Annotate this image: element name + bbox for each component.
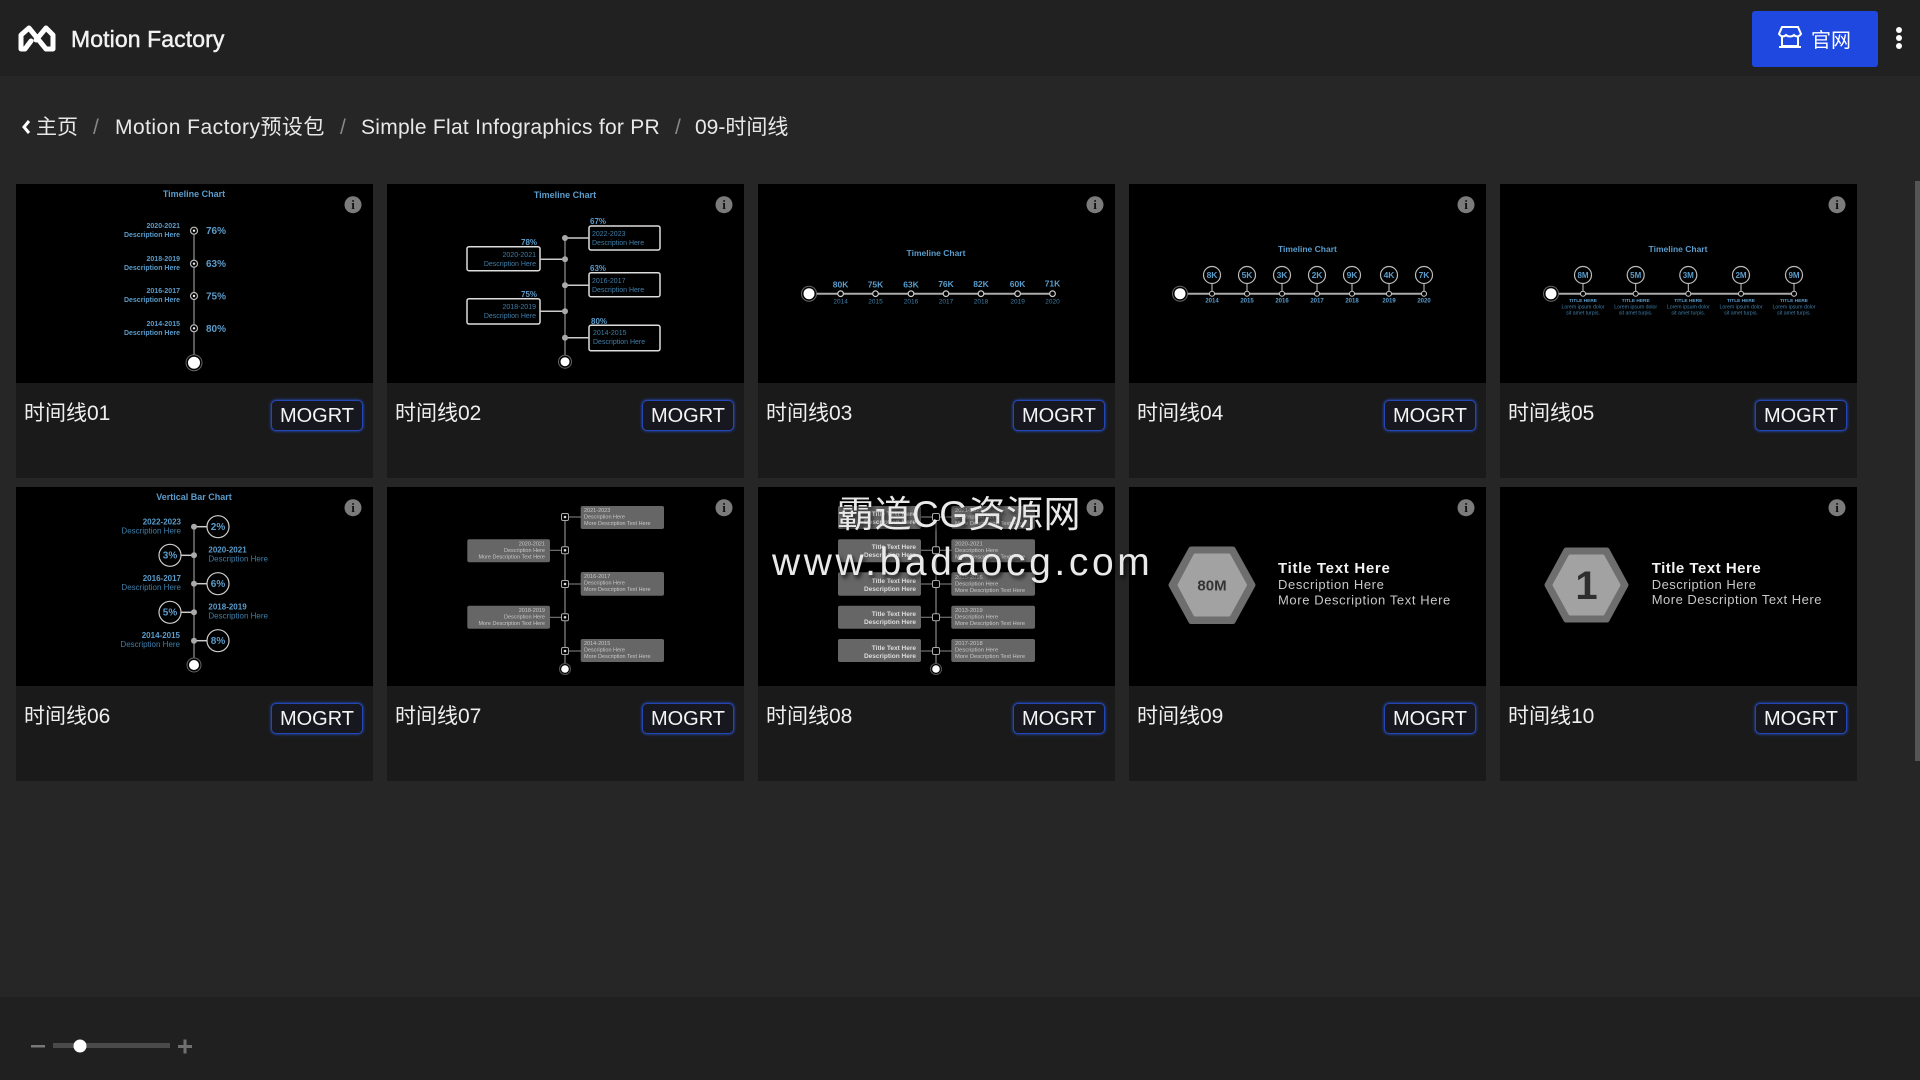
thumbnail 05: sit amet turpis. (1777, 310, 1811, 316)
MOGRT button: MOGRT (1764, 405, 1838, 427)
thumbnail 05: 5M (1630, 271, 1642, 280)
thumbnail 05: 3M (1683, 271, 1694, 280)
thumbnail 06: 6% (211, 579, 225, 590)
panel: card 02 (387, 184, 744, 478)
crumb: pack: Simple Flat Infographics for PR (361, 116, 660, 139)
thumbnail 05: sit amet turpis. (1671, 310, 1705, 316)
thumbnail 08: Title Text Here (872, 611, 916, 618)
thumbnail 08: More Description Text Here (955, 588, 1025, 594)
thumbnail 09: 80M (1197, 578, 1227, 594)
thumbnail 02: 80% (591, 317, 607, 326)
card title: 时间线01 (24, 402, 110, 425)
thumbnail 02: i (722, 197, 726, 212)
icon: more menu (1896, 27, 1902, 49)
thumbnail 08: More Description Text Here (955, 521, 1025, 527)
thumbnail 02: 2020-2021 (503, 252, 536, 259)
thumbnail 02: 2018-2019 (503, 304, 536, 311)
thumbnail 07: Description Here (584, 580, 625, 586)
thumbnail 05: TITLE HERE (1727, 298, 1756, 304)
MOGRT button: MOGRT (651, 708, 725, 730)
watermark line 1: 霸道CG资源网 (837, 494, 1081, 535)
watermark (772, 494, 1153, 586)
thumbnail 05: sit amet turpis. (1619, 310, 1653, 316)
thumbnail 04: i (1464, 197, 1468, 212)
card title: 时间线08 (766, 705, 852, 728)
thumbnail 06: 2% (211, 522, 225, 533)
MOGRT button: MOGRT (280, 405, 354, 427)
thumbnail 08: Description Here (955, 548, 998, 554)
thumbnail 01: 2018-2019 (147, 256, 180, 263)
thumbnail 04: 7K (1419, 270, 1430, 280)
thumbnail 03: 2019 (1010, 298, 1025, 306)
thumbnail 01: 80% (206, 324, 226, 335)
thumbnail 08: Description Here (955, 514, 998, 520)
thumbnail 10: More Description Text Here (1652, 592, 1822, 607)
thumbnail 01: Description Here (124, 330, 180, 337)
panel: card 09 (1129, 487, 1486, 781)
thumbnail 03: 2015 (868, 298, 883, 306)
logo icon (18, 26, 56, 52)
crumb separator: / (340, 116, 346, 139)
thumbnail 03: 2017 (939, 298, 954, 306)
thumbnail 08: Title Text Here (872, 544, 916, 551)
thumbnail 07: More Description Text Here (584, 587, 651, 593)
thumbnail 03: Timeline Chart (907, 248, 966, 258)
thumbnail 10: i (1835, 500, 1839, 515)
thumbnail 07: Description Here (584, 514, 625, 520)
button label: 官网 (1811, 30, 1851, 52)
thumbnail 05: 2M (1735, 271, 1747, 280)
thumbnail 05: TITLE HERE (1674, 298, 1703, 304)
card title: 时间线09 (1137, 705, 1223, 728)
MOGRT button (1013, 703, 1105, 734)
thumbnail 08: More Description Text Here (955, 554, 1025, 560)
card title: 时间线05 (1508, 402, 1594, 425)
thumbnail 08: Title Text Here (872, 645, 916, 652)
thumbnail 05: Lorem ipsum dolor (1773, 304, 1816, 310)
thumbnail 02: Description Here (484, 261, 536, 268)
panel: card 05 (1500, 184, 1857, 478)
thumbnail 02: Description Here (484, 313, 536, 320)
panel: card 10 (1500, 487, 1857, 781)
thumbnail 01: Description Here (124, 232, 180, 239)
thumbnail 02: Description Here (592, 240, 644, 247)
thumbnail 02: 2014-2015 (593, 330, 627, 337)
thumbnail 02: 63% (590, 264, 606, 273)
thumbnail 05: Lorem ipsum dolor (1720, 304, 1763, 310)
thumbnail 06: Description Here (208, 554, 269, 564)
thumbnail 01: 2020-2021 (147, 223, 180, 230)
thumbnail 08: Description Here (864, 653, 916, 660)
panel: card 03 (758, 184, 1115, 478)
thumbnail 05: TITLE HERE (1569, 298, 1598, 304)
thumbnail 08: Title Text Here (872, 578, 916, 585)
thumbnail 08: i (1093, 500, 1097, 515)
thumbnail 10: 1 (1575, 564, 1598, 608)
thumbnail 05: Lorem ipsum dolor (1562, 304, 1605, 310)
MOGRT button (1384, 400, 1476, 431)
thumbnail 02: 78% (521, 238, 537, 247)
MOGRT button (642, 400, 734, 431)
thumbnail 03 (758, 184, 1115, 383)
thumbnail 01: 75% (206, 292, 226, 302)
thumbnail 04: 3K (1277, 270, 1288, 280)
thumbnail 01: Description Here (124, 265, 180, 272)
thumbnail 04 (1129, 184, 1486, 383)
thumbnail 06 (16, 487, 373, 686)
crumb: home: 主页 (36, 116, 78, 139)
thumbnail 07: More Description Text Here (478, 621, 545, 627)
MOGRT button: MOGRT (1393, 708, 1467, 730)
thumbnail 04: 5K (1242, 270, 1253, 280)
thumbnail 05: Lorem ipsum dolor (1614, 304, 1657, 310)
brand name: Motion Factory (71, 26, 225, 52)
thumbnail 08: Description Here (955, 582, 998, 588)
thumbnail 01: Timeline Chart (163, 189, 225, 199)
thumbnail 08: More Description Text Here (955, 621, 1025, 627)
footer bar (0, 997, 1920, 1080)
thumbnail 08: Description Here (864, 552, 916, 559)
MOGRT button (271, 703, 363, 734)
thumbnail 07: 2014-2015 (584, 641, 610, 647)
thumbnail 06: 2020-2021 (208, 546, 247, 554)
card title: 时间线03 (766, 402, 852, 425)
thumbnail 09: Description Here (1278, 577, 1384, 592)
thumbnail 08: Description Here (864, 519, 916, 526)
thumbnail 07: More Description Text Here (478, 554, 545, 560)
thumbnail 08: 2015-2016 (955, 575, 983, 581)
thumbnail 08: Description Here (864, 619, 916, 626)
thumbnail 07: 2021-2023 (584, 508, 610, 514)
watermark line 2: www.badaocg.com (772, 541, 1153, 584)
icon: store (1778, 26, 1802, 48)
crumb separator: / (675, 116, 681, 139)
MOGRT button (1013, 400, 1105, 431)
scrollbar (1915, 181, 1920, 761)
thumbnail 06: i (351, 500, 355, 515)
thumbnail 02: 2016-2017 (592, 278, 626, 285)
crumb: presets: Motion Factory预设包 (115, 116, 325, 139)
thumbnail 06: Description Here (120, 640, 181, 649)
thumbnail 04: 2017 (1310, 298, 1324, 304)
thumbnail 05: 9M (1788, 271, 1800, 280)
thumbnail 08: Description Here (955, 614, 998, 620)
MOGRT button: MOGRT (1022, 405, 1096, 427)
thumbnail 03: i (1093, 197, 1097, 212)
thumbnail 02: Timeline Chart (534, 190, 596, 200)
thumbnail 02: 67% (590, 217, 606, 226)
thumbnail 10: Description Here (1652, 577, 1757, 592)
thumbnail 07: i (722, 500, 726, 515)
card title: 时间线04 (1137, 402, 1223, 425)
thumbnail 02 (387, 184, 744, 383)
thumbnail 05: Timeline Chart (1649, 244, 1708, 254)
thumbnail 07: Description Here (504, 614, 545, 620)
thumbnail 09: Title Text Here (1278, 560, 1390, 577)
thumbnail 06: Vertical Bar Chart (156, 492, 232, 502)
card title: 时间线02 (395, 402, 481, 425)
thumbnail 03: 60K (1010, 279, 1026, 289)
thumbnail 01: Description Here (124, 297, 180, 304)
thumbnail 09: More Description Text Here (1278, 592, 1451, 608)
thumbnail 03: 80K (833, 280, 849, 290)
thumbnail 08: More Description Text Here (955, 654, 1025, 660)
thumbnail 08: Description Here (864, 586, 916, 593)
crumb separator: / (93, 116, 99, 139)
thumbnail 06: 2016-2017 (143, 574, 182, 583)
MOGRT button: MOGRT (1022, 708, 1096, 730)
card title: 时间线07 (395, 705, 481, 728)
thumbnail 04: 2015 (1240, 298, 1254, 304)
thumbnail 05 (1500, 184, 1857, 383)
MOGRT button (271, 400, 363, 431)
thumbnail 01: 76% (206, 226, 226, 237)
thumbnail 01: 63% (206, 259, 226, 270)
thumbnail 06: 5% (163, 608, 177, 618)
zoom slider (31, 1040, 192, 1054)
thumbnail 03: 2020 (1045, 298, 1060, 306)
thumbnail 05: TITLE HERE (1622, 298, 1650, 304)
thumbnail 08: Description Here (955, 648, 998, 654)
breadcrumb (22, 116, 788, 139)
MOGRT button: MOGRT (1393, 405, 1467, 427)
thumbnail 02: Description Here (593, 339, 645, 346)
thumbnail 08: Title Text Here (872, 511, 916, 518)
thumbnail 03: 2016 (904, 298, 919, 306)
panel: card 08 (758, 487, 1115, 781)
thumbnail 01: i (351, 197, 355, 212)
MOGRT button: MOGRT (280, 708, 354, 730)
thumbnail 09 (1129, 487, 1486, 686)
panel: card 01 (16, 184, 373, 478)
thumbnail 08 (758, 487, 1115, 686)
thumbnail 08: 2013-2019 (955, 608, 983, 614)
thumbnail 06: Description Here (121, 583, 182, 592)
thumbnail 10: Title Text Here (1652, 560, 1761, 577)
thumbnail 02: 2022-2023 (592, 231, 626, 238)
thumbnail 01: 2014-2015 (147, 321, 180, 328)
thumbnail 04: Timeline Chart (1278, 244, 1337, 254)
thumbnail 05: sit amet turpis. (1566, 310, 1600, 316)
thumbnail 05: TITLE HERE (1780, 298, 1809, 304)
card title: 时间线06 (24, 705, 110, 728)
header bar (0, 0, 1920, 76)
MOGRT button (642, 703, 734, 734)
thumbnail 04: 4K (1384, 270, 1395, 280)
thumbnail 03: 82K (973, 279, 990, 289)
MOGRT button (1384, 703, 1476, 734)
thumbnail 06: 2022-2023 (143, 518, 182, 526)
thumbnail 04: 8K (1207, 270, 1218, 280)
thumbnail 04: 2016 (1275, 298, 1289, 304)
panel: card 07 (387, 487, 744, 781)
thumbnail 07: 2020-2021 (519, 542, 545, 548)
thumbnail 03: 75K (868, 280, 884, 290)
MOGRT button (1755, 400, 1847, 431)
crumb: current: 09-时间线 (695, 116, 788, 139)
thumbnail 06: 2014-2015 (142, 631, 181, 640)
thumbnail 07: Description Here (504, 548, 545, 554)
thumbnail 07: 2018-2019 (519, 608, 545, 614)
thumbnail 02: 75% (521, 290, 537, 299)
icon: back chevron (22, 120, 30, 134)
thumbnail 04: 2018 (1345, 298, 1359, 304)
thumbnail 05: sit amet turpis. (1724, 310, 1758, 316)
thumbnail 08: 2017-2018 (955, 641, 983, 647)
thumbnail 03: 2014 (833, 298, 848, 306)
thumbnail 07: More Description Text Here (584, 654, 651, 660)
thumbnail 08: 2020-2021 (955, 542, 983, 548)
thumbnail 01: 2016-2017 (147, 288, 180, 295)
thumbnail 08: 2021-2023 (955, 508, 983, 514)
thumbnail 06: Description Here (208, 612, 269, 620)
thumbnail 06: 3% (163, 550, 177, 562)
thumbnail 04: 2014 (1205, 298, 1219, 304)
thumbnail 05: Lorem ipsum dolor (1667, 304, 1710, 310)
thumbnail 04: 9K (1347, 270, 1358, 280)
thumbnail 07: More Description Text Here (584, 521, 651, 527)
thumbnail 03: 63K (903, 280, 920, 290)
website button (1752, 11, 1878, 67)
MOGRT button: MOGRT (1764, 708, 1838, 730)
thumbnail 06: 2018-2019 (208, 602, 247, 612)
thumbnail 02: Description Here (592, 287, 644, 294)
thumbnail 03: 76K (938, 279, 955, 289)
thumbnail 05: 8M (1577, 271, 1589, 280)
panel: card 04 (1129, 184, 1486, 478)
thumbnail 07: Description Here (584, 648, 625, 654)
thumbnail 06: Description Here (121, 526, 182, 536)
thumbnail 04: 2019 (1382, 298, 1396, 304)
thumbnail 06: 8% (211, 636, 225, 647)
card title: 时间线10 (1508, 705, 1594, 728)
thumbnail 07 (387, 487, 744, 686)
thumbnail 10 (1500, 487, 1857, 686)
thumbnail 03: 71K (1045, 278, 1061, 288)
panel: card 06 (16, 487, 373, 781)
thumbnail 04: 2020 (1417, 298, 1431, 304)
thumbnail 05: i (1835, 197, 1839, 212)
thumbnail 04: 2K (1312, 270, 1323, 280)
thumbnail 09: i (1464, 500, 1468, 515)
MOGRT button: MOGRT (651, 405, 725, 427)
thumbnail 07: 2016-2017 (584, 574, 610, 580)
MOGRT button (1755, 703, 1847, 734)
thumbnail 03: 2018 (974, 298, 989, 306)
thumbnail 01 (16, 184, 373, 383)
